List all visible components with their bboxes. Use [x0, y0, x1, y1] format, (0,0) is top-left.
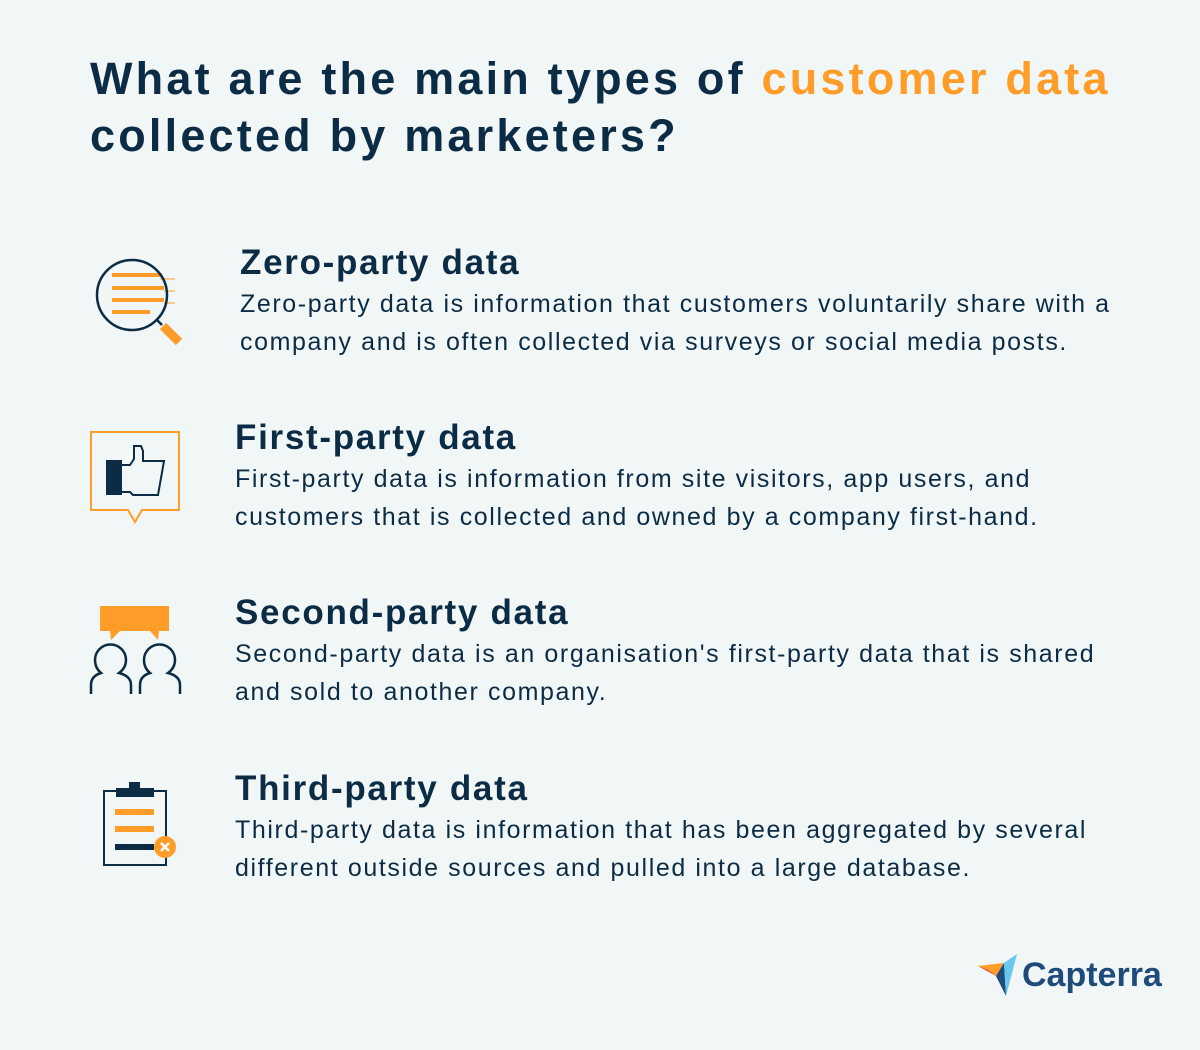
title	[90, 53, 1111, 161]
section: third-party: Third-party data is information that has been aggregated by several	[235, 816, 1087, 844]
section: second-party: and sold to another company.	[235, 678, 607, 706]
section: first-party: First-party data	[235, 418, 517, 457]
section: zero-party	[240, 243, 1111, 356]
section: first-party: customers that is collected and owned by a company first-hand.	[235, 503, 1039, 531]
section: zero-party: Zero-party data	[240, 243, 520, 282]
logo: Capterra	[978, 954, 1162, 996]
title: What are the main types of customer data	[90, 53, 1111, 104]
section: second-party: Second-party data is an organisation's first-party data that is shared	[235, 640, 1095, 668]
section: third-party: different outside sources and pulled into a large database.	[235, 854, 971, 882]
section: first-party: First-party data is information from site visitors, app users, and	[235, 465, 1031, 493]
logo: Capterra: Capterra	[1022, 956, 1162, 994]
section: second-party	[235, 593, 1095, 706]
section: third-party: Third-party data	[235, 769, 529, 808]
section: third-party	[235, 769, 1087, 882]
section: zero-party: company and is often collected via surveys or social media posts.	[240, 328, 1068, 356]
section: first-party	[235, 418, 1039, 531]
title: collected by marketers?	[90, 110, 679, 161]
section: zero-party: Zero-party data is information that customers voluntarily share with a	[240, 290, 1111, 318]
section: second-party: Second-party data	[235, 593, 569, 632]
